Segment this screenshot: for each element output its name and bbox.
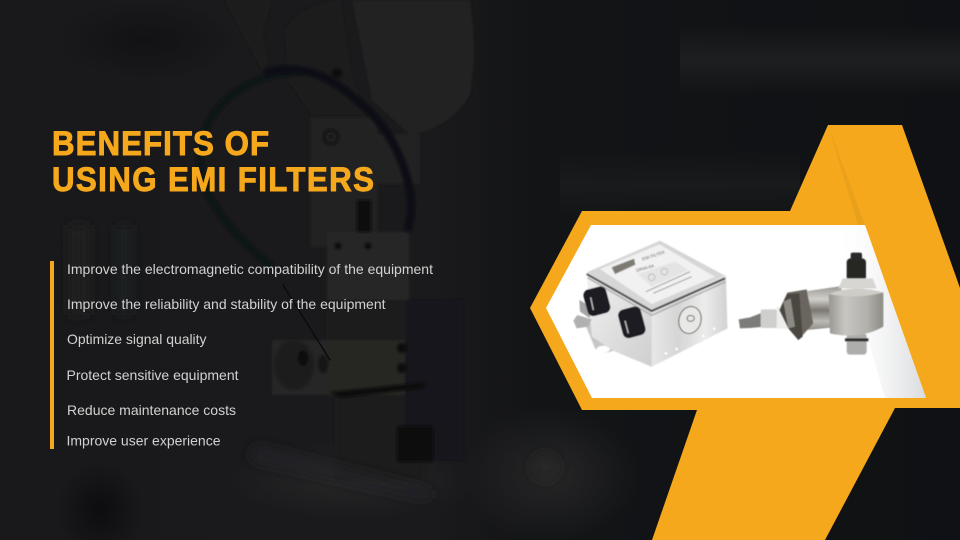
lid xyxy=(587,241,725,312)
benefits list: Reduce maintenance costs xyxy=(67,402,236,418)
title: BENEFITS OF xyxy=(52,124,269,162)
threaded stud xyxy=(739,312,765,328)
title xyxy=(52,124,374,198)
product: EMI filter box: EMI FILTER xyxy=(641,250,665,262)
benefits list xyxy=(66,261,433,448)
robot arm castings xyxy=(225,0,474,480)
benefits list: Improve user experience xyxy=(66,432,221,448)
bolts and dark machine details xyxy=(274,68,433,462)
benefits list: Protect sensitive equipment xyxy=(66,367,239,383)
accent bar xyxy=(50,261,54,449)
white product panel xyxy=(546,225,926,398)
lower stud xyxy=(847,333,867,355)
orange arrow frame xyxy=(530,125,960,540)
cylinder head xyxy=(829,289,883,336)
mounting flange xyxy=(583,320,727,367)
dark cable with spiral wrap xyxy=(200,70,411,360)
panel fold shadow xyxy=(835,225,926,398)
product: EMI filter box: DR4A-6A xyxy=(636,263,655,273)
hex flange xyxy=(779,289,813,340)
benefits list: Improve the electromagnetic compatibility of the equipment xyxy=(67,261,433,277)
side faces xyxy=(587,273,652,367)
product: metal feedthrough capacitor xyxy=(739,253,883,355)
top stud xyxy=(847,258,866,281)
benefits list: Optimize signal quality xyxy=(67,331,206,347)
black connectors xyxy=(582,285,612,317)
blurred foreground streaks xyxy=(70,225,558,500)
barrel xyxy=(803,286,842,330)
ribbon fold line xyxy=(828,125,865,225)
round sticker xyxy=(676,304,704,336)
title: USING EMI FILTERS xyxy=(52,160,374,198)
benefits list: Improve the reliability and stability of the equipment xyxy=(67,296,386,312)
product: EMI filter box xyxy=(573,241,727,367)
lid label xyxy=(612,259,635,274)
spade terminals xyxy=(579,300,590,318)
